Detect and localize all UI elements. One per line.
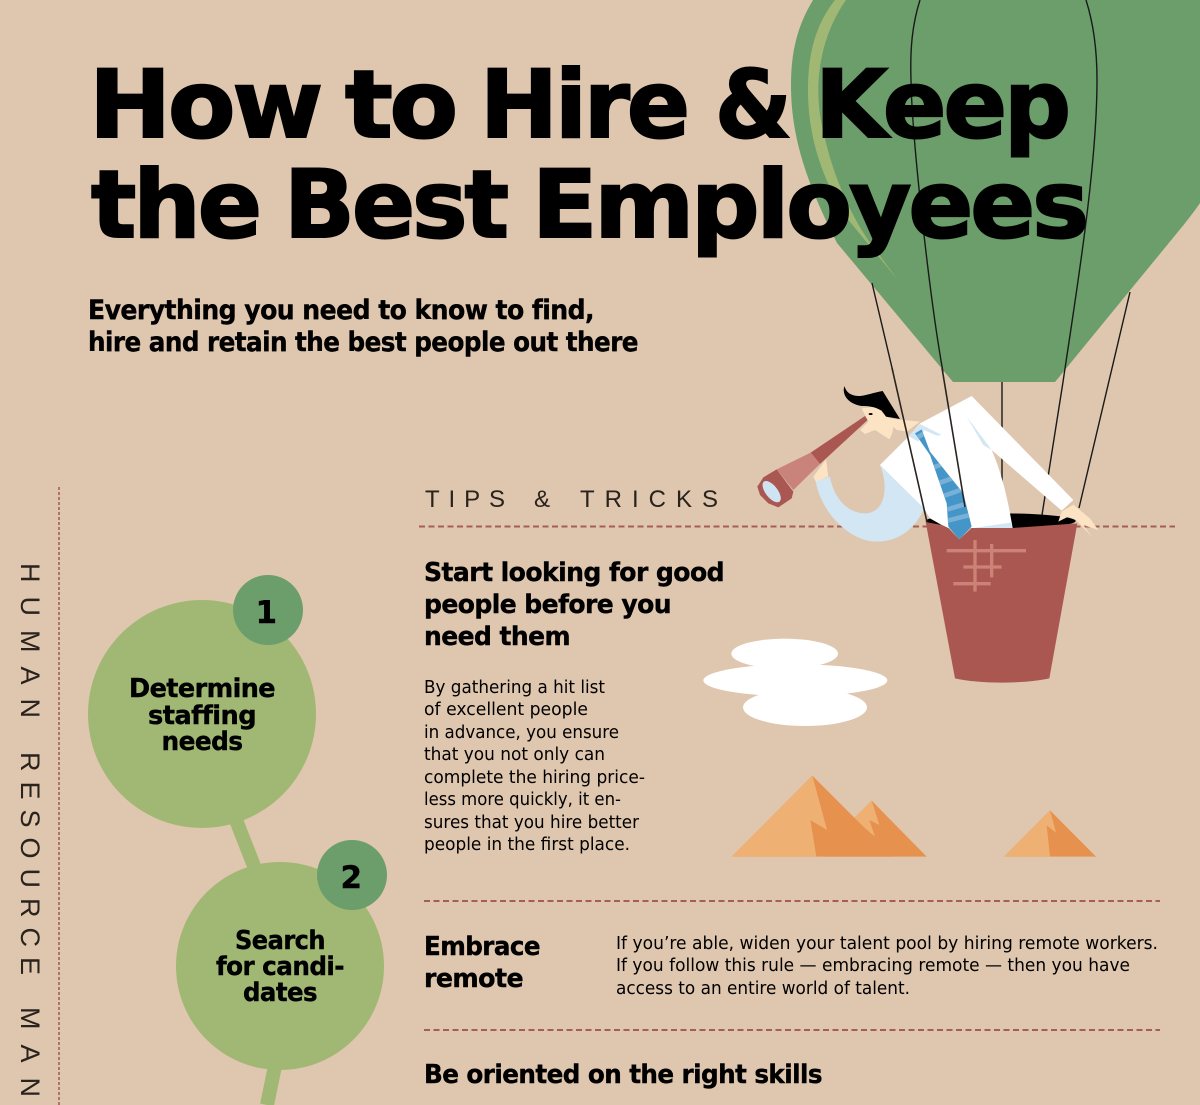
tie (915, 430, 972, 540)
vertical section label: HUMAN (15, 563, 45, 718)
step 2 label: dates (243, 978, 317, 1008)
basket patch (947, 540, 1026, 592)
step 2 label (216, 926, 344, 1008)
tip 3 heading: Be oriented on the right skills (424, 1060, 822, 1090)
ropes over figure (892, 368, 965, 522)
hair (844, 386, 900, 419)
title: & (715, 51, 789, 160)
mountains (732, 776, 1096, 857)
vertical section label: MAN (15, 1007, 45, 1097)
tip 2 heading: Embrace (424, 932, 540, 962)
step 1 label: needs (162, 727, 243, 757)
step 1 label: Determine (129, 674, 275, 704)
step connectors (236, 820, 275, 1105)
title: the (91, 151, 259, 260)
tip 1 body: By gathering a hit list (424, 677, 605, 698)
step 1 label: staffing (148, 701, 256, 731)
title: Hire (480, 51, 687, 160)
tip 1 heading (424, 558, 724, 652)
title: Employees (532, 151, 1086, 260)
shirt (880, 396, 1073, 528)
subtitle (88, 295, 638, 358)
title: Keep (815, 51, 1068, 160)
tip 1 body (424, 677, 645, 855)
dashed rule (424, 900, 1160, 902)
tips and tricks heading: TIPS (425, 486, 505, 513)
tips and tricks heading: & (534, 486, 550, 513)
badge: number 2 (317, 840, 387, 910)
sleeve (816, 465, 924, 542)
tip 2 heading (424, 932, 540, 994)
step 2 label: for candi- (216, 952, 344, 982)
step 1 label (129, 674, 275, 757)
step 2 label: Search (235, 926, 325, 956)
tip 1 body: sures that you hire better (424, 812, 640, 833)
badge: number 2: 2 (341, 860, 361, 896)
tip 1 body: less more quickly, it en- (424, 789, 621, 810)
mountain: small (1004, 810, 1096, 857)
tip 1 body: people in the first place. (424, 834, 630, 855)
step 1 (88, 575, 316, 828)
hand on basket (1058, 505, 1098, 537)
basket opening (926, 513, 1076, 529)
vertical section label: RESOURCE (15, 752, 45, 975)
title: How (89, 51, 320, 160)
tip 2 body (616, 933, 1158, 999)
tips dashed rule (419, 526, 1175, 528)
cloud (703, 639, 887, 726)
vertical dashed divider (58, 487, 60, 1105)
title: to (345, 51, 455, 160)
badge: number 1: 1 (256, 595, 276, 631)
mountain: back (823, 801, 927, 857)
hand holding telescope (813, 459, 828, 482)
tips and tricks heading (425, 486, 718, 513)
shirt shadow (908, 417, 1013, 528)
icon: telescope (757, 416, 868, 507)
tip 2 body: access to an entire world of talent. (616, 978, 910, 999)
mountain: front (732, 776, 893, 857)
tip 1 body: in advance, you ensure (424, 722, 619, 743)
businessman in basket (757, 386, 1098, 683)
dashed rule (424, 1029, 1160, 1031)
head (844, 386, 920, 439)
tip 1 heading: need them (424, 622, 570, 652)
tip 2 body: If you follow this rule — embracing remote — then you have (616, 955, 1130, 976)
eye (869, 413, 873, 415)
tip 1 body: complete the hiring price- (424, 767, 645, 788)
balloon ropes behind figure (872, 0, 1130, 515)
subtitle: hire and retain the best people out there (88, 327, 638, 358)
tips and tricks heading: TRICKS (580, 486, 718, 513)
title (89, 51, 1086, 260)
tip 1 body: that you not only can (424, 744, 605, 765)
basket (926, 522, 1077, 683)
tip 2 heading: remote (424, 964, 523, 994)
step 2 (176, 840, 387, 1070)
tip 2 body: If you’re able, widen your talent pool by hiring remote workers. (616, 933, 1158, 954)
hot air balloon envelope (791, 0, 1200, 382)
tip 1 heading: people before you (424, 590, 671, 620)
badge: number 1 (233, 575, 303, 645)
tip 1 body: of excellent people (424, 699, 588, 720)
vertical section label (15, 563, 45, 1097)
tip 1 heading: Start looking for good (424, 558, 724, 588)
subtitle: Everything you need to know to find, (88, 295, 594, 326)
title: Best (284, 151, 507, 260)
